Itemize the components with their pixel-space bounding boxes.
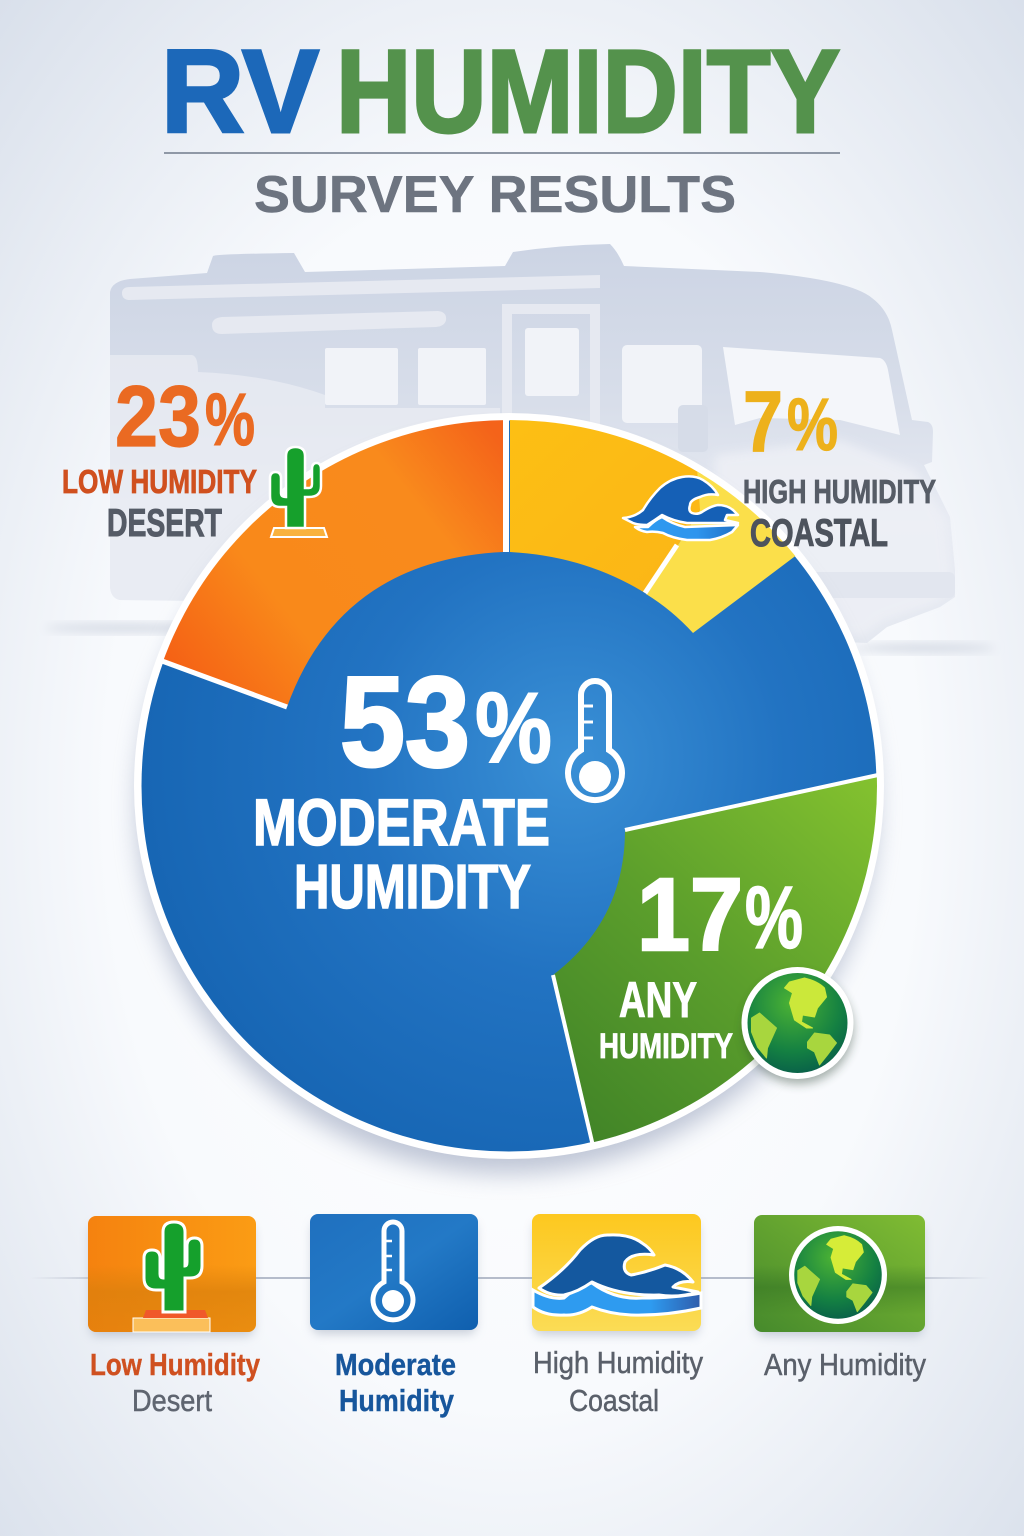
label: 17% any humidity: % (745, 868, 803, 967)
callout: 7% high humidity: HIGH HUMIDITY (743, 473, 936, 510)
callout: 23% low humidity: 23 (115, 369, 201, 465)
callout: 7% high humidity: 7 (743, 374, 783, 470)
legend item: high humidity coastal: Coastal (569, 1383, 659, 1418)
pie chart (124, 413, 890, 1186)
legend item: moderate humidity (310, 1214, 478, 1418)
icon: thermometer (568, 681, 622, 800)
legend item: high humidity coastal: High Humidity (533, 1345, 703, 1380)
slice: low humidity 23% (164, 420, 503, 707)
legend item: moderate humidity: Humidity (339, 1383, 455, 1418)
label: 17% any humidity: HUMIDITY (599, 1027, 733, 1066)
subtitle: SURVEY RESULTS (254, 166, 736, 224)
icon: cactus (270, 447, 327, 537)
callout: 23% low humidity: DESERT (107, 502, 222, 545)
title: HUMIDITY (336, 26, 840, 158)
label: 53% moderate humidity: 53 (340, 651, 470, 794)
callout: 23% low humidity: LOW HUMIDITY (62, 463, 257, 500)
legend connector line (30, 1277, 990, 1279)
label: 17% any humidity: 17 (637, 857, 743, 972)
slice: coastal lighter wedge (646, 472, 796, 633)
illustration: faded RV (45, 244, 995, 653)
slice: high humidity 7% (510, 420, 704, 593)
legend item: moderate humidity: Moderate (335, 1347, 456, 1382)
callout: 23% low humidity (62, 369, 257, 545)
icon: wave (623, 476, 738, 540)
callout: 23% low humidity: % (205, 378, 255, 461)
legend item: any humidity (754, 1215, 926, 1382)
icon: globe (742, 967, 854, 1084)
label: 17% any humidity: ANY (619, 972, 697, 1028)
label: 53% moderate humidity: % (475, 672, 552, 784)
legend item: low humidity desert (88, 1216, 261, 1418)
slice: any humidity 17% (553, 777, 877, 1142)
legend item: high humidity coastal (532, 1214, 703, 1418)
callout: 7% high humidity: % (787, 383, 838, 466)
label: 53% moderate humidity: MODERATE (253, 785, 550, 859)
slice: moderate humidity 53% (142, 420, 876, 1152)
callout: 7% high humidity: COASTAL (750, 512, 888, 555)
legend item: low humidity desert: Low Humidity (90, 1347, 261, 1382)
title (161, 26, 840, 158)
label: 53% moderate humidity (253, 651, 552, 922)
legend item: low humidity desert: Desert (132, 1383, 212, 1418)
label: 17% any humidity (599, 857, 803, 1066)
callout: 7% high humidity (743, 374, 936, 555)
legend item: any humidity: Any Humidity (764, 1347, 926, 1382)
title: RV (161, 26, 319, 158)
label: 53% moderate humidity: HUMIDITY (294, 853, 531, 922)
